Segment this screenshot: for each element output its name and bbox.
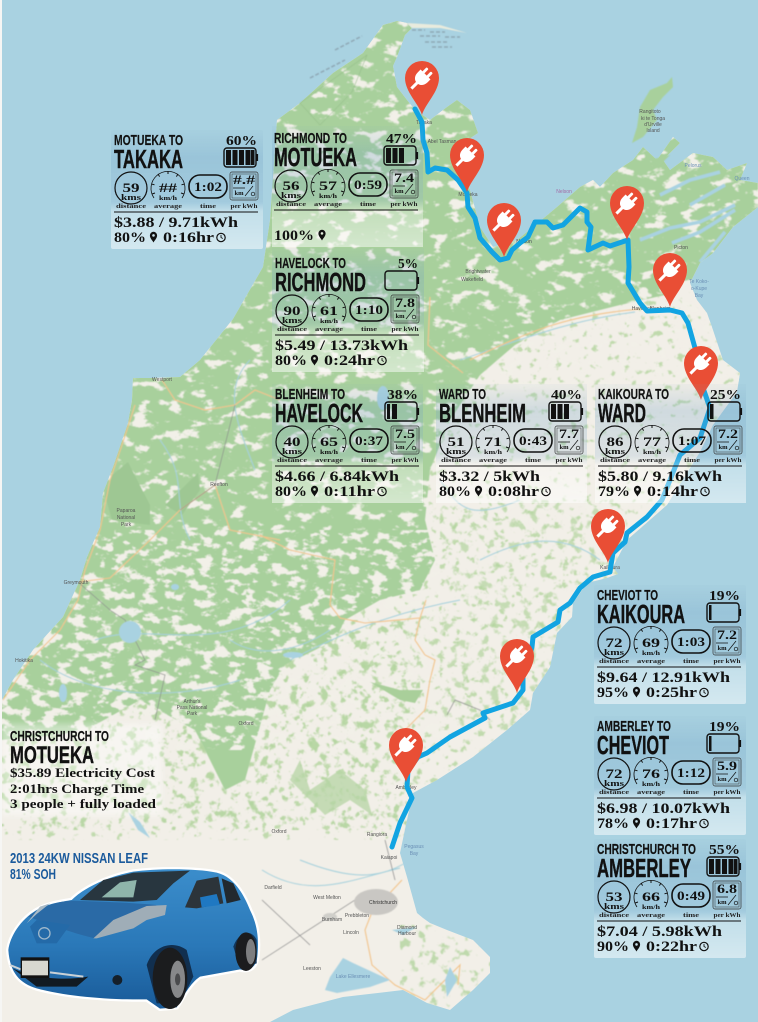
panel: Richmond to Motueka — [272, 126, 423, 247]
panel: Blenheim to Havelock: HAVELOCK — [275, 398, 363, 428]
map: place labels: Blenheim — [650, 306, 670, 312]
panel: Blenheim to Havelock: 40 — [284, 434, 300, 449]
map: place labels: Diamond — [397, 925, 417, 931]
panel: Motueka to Takaka: km/h — [159, 195, 177, 202]
panel: Kaikoura to Ward: 25% — [710, 388, 741, 403]
panel: Havelock to Richmond: km/h — [320, 318, 338, 325]
panel: Cheviot to Kaikoura: 69 — [642, 635, 661, 650]
summary: Christchurch to Motueka totals: CHRISTCHURCH TO — [10, 728, 109, 745]
map: place labels: West Melton — [313, 895, 341, 901]
summary: Christchurch to Motueka totals: 2:01hrs Charge Time — [10, 782, 145, 796]
map: place labels: Bay — [410, 851, 419, 857]
panel: Havelock to Richmond: 5% — [398, 257, 418, 272]
panel: Christchurch to Amberley: kms — [604, 901, 625, 911]
panel: Ward to Blenheim: km — [559, 444, 569, 451]
panel: Kaikoura to Ward: 77 — [643, 434, 662, 449]
panel: Kaikoura to Ward: average — [638, 457, 666, 464]
Marlborough Sounds channels — [640, 172, 735, 262]
panel: Havelock to Richmond: 80% — [275, 353, 307, 369]
panel: Amberley to Cheviot — [594, 716, 746, 835]
vehicle caption — [10, 850, 148, 883]
panel: Blenheim to Havelock: time — [361, 457, 377, 464]
map: place labels: Brightwater — [465, 269, 491, 275]
vehicle caption: 81% SOH — [10, 866, 56, 883]
Christchurch urban area — [354, 889, 398, 915]
panel: Motueka to Takaka: MOTUEKA TO — [114, 132, 183, 149]
panel: Cheviot to Kaikoura: distance — [599, 658, 629, 665]
panel: Richmond to Motueka: km/h — [319, 193, 337, 200]
map: place labels: National — [117, 515, 135, 521]
panel: Havelock to Richmond: $5.49 / 13.73kWh — [275, 338, 409, 354]
panel: Ward to Blenheim: 0:43 — [519, 433, 548, 448]
panel: Cheviot to Kaikoura: km/h — [642, 650, 660, 657]
panel: Ward to Blenheim: 0:08hr — [488, 484, 539, 500]
map: place labels: ki te Tonga — [641, 116, 665, 122]
panel: Ward to Blenheim: $3.32 / 5kWh — [439, 469, 541, 485]
map: place labels: Christchurch — [369, 900, 397, 906]
panel: Ward to Blenheim: per kWh — [556, 457, 583, 464]
roads — [3, 297, 640, 1000]
panel: Havelock to Richmond: 1:10 — [355, 302, 383, 317]
panel: Christchurch to Amberley: 0:49 — [677, 888, 706, 903]
panel: Kaikoura to Ward: WARD — [598, 398, 646, 428]
panel: Ward to Blenheim: 71 — [484, 434, 502, 449]
map: place labels: Abel Tasman — [428, 139, 457, 145]
panel: Christchurch to Amberley: CHRISTCHURCH TO — [597, 841, 696, 858]
panel: Blenheim to Havelock: 65 — [320, 434, 339, 449]
panel: Richmond to Motueka: 100% — [274, 228, 314, 244]
panel: Richmond to Motueka: time — [360, 201, 376, 208]
map: place labels: Havelock — [632, 306, 653, 312]
map: place labels: Lake Ellesmere — [336, 974, 370, 980]
panel: Havelock to Richmond: average — [315, 326, 343, 333]
panel: Motueka to Takaka: 0:16hr — [163, 230, 214, 246]
panel: Christchurch to Amberley: $7.04 / 5.98kWh — [597, 924, 723, 940]
panel: Kaikoura to Ward: kms — [605, 446, 626, 456]
panel: Motueka to Takaka: $3.88 / 9.71kWh — [114, 215, 239, 231]
panel: Richmond to Motueka: RICHMOND TO — [274, 130, 347, 147]
panel: Christchurch to Amberley: distance — [599, 912, 629, 919]
panel: Kaikoura to Ward: km/h — [643, 449, 661, 456]
panel: Cheviot to Kaikoura — [594, 585, 746, 704]
panel: Havelock to Richmond: 61 — [320, 303, 338, 318]
map: place labels: Prebbleton — [345, 913, 369, 919]
map: place labels: Kaikoura — [600, 565, 620, 571]
panel: Richmond to Motueka: 7.4 — [394, 170, 415, 185]
panel: Havelock to Richmond: 7.8 — [395, 295, 416, 310]
panel: Christchurch to Amberley: 53 — [606, 889, 623, 904]
map: place labels: Reefton — [210, 482, 228, 488]
panel: Amberley to Cheviot: 0:17hr — [646, 816, 697, 832]
panel: Ward to Blenheim: BLENHEIM — [439, 398, 526, 428]
rivers — [40, 312, 635, 886]
panel: Christchurch to Amberley: average — [637, 912, 665, 919]
panel: Richmond to Motueka: per kWh — [390, 201, 418, 208]
panel: Havelock to Richmond: 0:24hr — [324, 353, 375, 369]
panel: Motueka to Takaka: average — [154, 203, 182, 210]
panel: Amberley to Cheviot: average — [637, 789, 665, 796]
route line — [392, 109, 710, 847]
panel: Cheviot to Kaikoura: average — [637, 658, 665, 665]
panel: Motueka to Takaka: 59 — [122, 180, 140, 195]
panel: Blenheim to Havelock: kms — [282, 446, 303, 456]
map: place labels: Rangitoto — [639, 109, 661, 115]
panel: Amberley to Cheviot: per kWh — [714, 789, 741, 796]
panel: Cheviot to Kaikoura: 19% — [709, 589, 740, 604]
panel: Amberley to Cheviot: 78% — [597, 816, 629, 832]
panel: Blenheim to Havelock: 80% — [275, 484, 307, 500]
map: place labels: Leeston — [303, 966, 321, 972]
panel: Ward to Blenheim: WARD TO — [439, 386, 486, 403]
lakes — [119, 621, 141, 643]
panel: Motueka to Takaka: 80% — [114, 230, 146, 246]
panel: Richmond to Motueka: average — [314, 201, 342, 208]
panel: Amberley to Cheviot: distance — [599, 789, 629, 796]
map: place labels: Burnham — [322, 917, 342, 923]
panel: Richmond to Motueka: distance — [276, 201, 306, 208]
panel: Havelock to Richmond: 90 — [284, 303, 300, 318]
panel: Motueka to Takaka: 1:02 — [194, 179, 222, 194]
map: place labels: Westport — [152, 377, 173, 383]
panel: Havelock to Richmond: HAVELOCK TO — [275, 255, 346, 272]
panel: Christchurch to Amberley: 55% — [709, 843, 740, 858]
panel: Kaikoura to Ward: distance — [600, 457, 630, 464]
panel: Christchurch to Amberley: per kWh — [714, 912, 741, 919]
map: place labels: Park — [121, 522, 132, 528]
panel: Kaikoura to Ward: 86 — [606, 434, 624, 449]
map: place labels: Pelorus — [685, 163, 702, 169]
panel: Richmond to Motueka: 0:59 — [354, 177, 383, 192]
panel: Kaikoura to Ward: time — [684, 457, 700, 464]
panel: Motueka to Takaka: time — [200, 203, 216, 210]
panel: Richmond to Motueka: 47% — [386, 132, 417, 147]
panel: Blenheim to Havelock: distance — [277, 457, 307, 464]
panel: Motueka to Takaka: #.# — [233, 172, 256, 187]
map: place labels: Amberley — [395, 785, 417, 791]
map: place labels: Wakefield — [461, 277, 483, 283]
panel: Motueka to Takaka — [111, 130, 263, 249]
map: place labels: Kaiapoi — [381, 855, 397, 861]
panel: Amberley to Cheviot: AMBERLEY TO — [597, 718, 671, 735]
panel: Cheviot to Kaikoura: per kWh — [714, 658, 741, 665]
panel: Kaikoura to Ward — [595, 384, 746, 503]
panel: Motueka to Takaka: ## — [159, 180, 178, 195]
panel: Motueka to Takaka: TAKAKA — [114, 144, 183, 174]
panel: Ward to Blenheim: 40% — [551, 388, 582, 403]
panel: Ward to Blenheim: time — [525, 457, 541, 464]
map: D'Urville Island and spit — [300, 23, 673, 165]
map: place labels: Paparoa — [117, 508, 136, 514]
map: place labels: o-Kupe — [691, 286, 707, 292]
panel: Kaikoura to Ward: 1:07 — [678, 433, 707, 448]
map: place labels: Pegasus — [404, 844, 424, 850]
panel: Cheviot to Kaikoura: kms — [604, 647, 625, 657]
panel: Christchurch to Amberley: time — [683, 912, 699, 919]
panel: Motueka to Takaka: per kWh — [230, 203, 258, 210]
panel: Christchurch to Amberley: km — [717, 899, 727, 906]
map: place labels: Darfield — [264, 885, 282, 891]
panel: Amberley to Cheviot: km — [717, 776, 727, 783]
panel: Amberley to Cheviot: CHEVIOT — [597, 730, 669, 760]
panel: Kaikoura to Ward: 7.2 — [718, 426, 738, 441]
panel: Cheviot to Kaikoura: 7.2 — [717, 627, 737, 642]
panel: Cheviot to Kaikoura: 95% — [597, 685, 629, 701]
car: blue Nissan Leaf — [8, 869, 258, 1009]
panel: Cheviot to Kaikoura: 1:03 — [677, 634, 706, 649]
map: place labels: Park — [187, 711, 198, 717]
panel: Richmond to Motueka: 56 — [282, 178, 300, 193]
summary: Christchurch to Motueka totals — [2, 724, 162, 816]
map: place labels: Arthur's — [183, 699, 201, 705]
map: place labels: Oxford — [238, 721, 254, 727]
panel: Blenheim to Havelock: average — [315, 457, 343, 464]
panel: Ward to Blenheim: 51 — [448, 434, 464, 449]
panel: Christchurch to Amberley: 66 — [642, 889, 661, 904]
map: place labels: Rangiora — [367, 832, 387, 838]
panel: Havelock to Richmond: time — [361, 326, 377, 333]
left white margin — [0, 0, 2, 1022]
panel: Cheviot to Kaikoura: CHEVIOT TO — [597, 587, 658, 604]
summary: Christchurch to Motueka totals: $35.89 Electricity Cost — [10, 766, 156, 780]
panel: Amberley to Cheviot: 1:12 — [677, 765, 705, 780]
panel: Christchurch to Amberley: km/h — [642, 904, 660, 911]
panel: Blenheim to Havelock: km/h — [320, 449, 338, 456]
panel: Havelock to Richmond: kms — [282, 315, 303, 325]
panel: Christchurch to Amberley — [594, 839, 746, 958]
panel: Blenheim to Havelock: per kWh — [392, 457, 419, 464]
panel: Amberley to Cheviot: kms — [604, 778, 625, 788]
map: place labels: Te Koko- — [689, 279, 709, 285]
panel: Cheviot to Kaikoura: $9.64 / 12.91kWh — [597, 670, 731, 686]
panel: Kaikoura to Ward: KAIKOURA TO — [598, 386, 669, 403]
summary: Christchurch to Motueka totals: 3 people + fully loaded — [10, 797, 156, 811]
panel: Amberley to Cheviot: km/h — [642, 781, 660, 788]
panel: Havelock to Richmond — [272, 248, 424, 372]
panel: Motueka to Takaka: km — [234, 190, 244, 197]
map: place labels: Oxford — [271, 829, 287, 835]
panel: Amberley to Cheviot: $6.98 / 10.07kWh — [597, 801, 731, 817]
panel: Motueka to Takaka: kms — [121, 192, 142, 202]
map: place labels: Picton — [674, 245, 688, 251]
panel: Blenheim to Havelock: $4.66 / 6.84kWh — [275, 469, 400, 485]
panel: Amberley to Cheviot: time — [683, 789, 699, 796]
panel: Ward to Blenheim — [436, 384, 587, 503]
panel: Cheviot to Kaikoura: km — [717, 645, 727, 652]
panel: Cheviot to Kaikoura: time — [683, 658, 699, 665]
map: place labels: Hokitika — [15, 658, 33, 664]
panel: Blenheim to Havelock: 38% — [387, 388, 418, 403]
panel: Blenheim to Havelock: 0:11hr — [324, 484, 375, 500]
panel: Richmond to Motueka: 57 — [319, 178, 338, 193]
panel: Richmond to Motueka: MOTUEKA — [274, 142, 357, 172]
panel: Christchurch to Amberley: 90% — [597, 939, 629, 955]
panel: Ward to Blenheim: kms — [446, 446, 467, 456]
panel: Amberley to Cheviot: 19% — [709, 720, 740, 735]
map: place labels: Nelson — [516, 239, 532, 245]
panel: Blenheim to Havelock: 0:37 — [355, 433, 384, 448]
panel: Kaikoura to Ward: 79% — [598, 484, 630, 500]
panel: Christchurch to Amberley: AMBERLEY — [597, 853, 691, 883]
panel: Blenheim to Havelock — [272, 384, 423, 503]
charge stop pins — [389, 61, 718, 782]
panel: Ward to Blenheim: km/h — [484, 449, 502, 456]
map: place labels: Lincoln — [343, 930, 359, 936]
panel: Ward to Blenheim: average — [479, 457, 507, 464]
panel: Blenheim to Havelock: km — [395, 444, 405, 451]
map: place labels: Motueka — [458, 192, 478, 198]
panel: Ward to Blenheim: 80% — [439, 484, 471, 500]
map: place labels: Takaka — [416, 120, 432, 126]
panel: Christchurch to Amberley: 0:22hr — [646, 939, 697, 955]
map: place labels: Island — [646, 128, 660, 134]
panel: Motueka to Takaka: 60% — [226, 134, 257, 149]
panel: Havelock to Richmond: distance — [277, 326, 307, 333]
panel: Motueka to Takaka: distance — [116, 203, 146, 210]
map: place labels: Harbour — [398, 931, 416, 937]
panel: Havelock to Richmond: km — [395, 313, 405, 320]
panel: Kaikoura to Ward: km — [718, 444, 728, 451]
vehicle caption: 2013 24KW NISSAN LEAF — [10, 850, 148, 867]
panel: Amberley to Cheviot: 5.9 — [717, 758, 738, 773]
panel: Blenheim to Havelock: 7.5 — [395, 426, 416, 441]
panel: Amberley to Cheviot: 72 — [606, 766, 622, 781]
panel: Richmond to Motueka: km — [394, 188, 404, 195]
map: place labels: Nelson — [556, 189, 572, 195]
panel: Ward to Blenheim: distance — [441, 457, 471, 464]
panel: Kaikoura to Ward: per kWh — [714, 457, 742, 464]
map: place labels: Greymouth — [64, 580, 89, 586]
panel: Havelock to Richmond: per kWh — [392, 326, 419, 333]
panel: Amberley to Cheviot: 76 — [642, 766, 661, 781]
panel: Ward to Blenheim: 7.7 — [559, 426, 580, 441]
panel: Kaikoura to Ward: 0:14hr — [647, 484, 698, 500]
panel: Cheviot to Kaikoura: 0:25hr — [646, 685, 697, 701]
panel: Havelock to Richmond: RICHMOND — [275, 267, 366, 297]
map: place labels: Bay — [695, 293, 704, 299]
panel: Cheviot to Kaikoura: KAIKOURA — [597, 599, 685, 629]
panel: Richmond to Motueka: kms — [281, 190, 302, 200]
summary: Christchurch to Motueka totals: MOTUEKA — [10, 742, 94, 769]
panel: Cheviot to Kaikoura: 72 — [606, 635, 622, 650]
panel: Kaikoura to Ward: $5.80 / 9.16kWh — [598, 469, 723, 485]
panel: Christchurch to Amberley: 6.8 — [717, 881, 738, 896]
map: place labels: d'Urville — [644, 122, 662, 128]
map: place labels: Queen — [734, 176, 750, 182]
map: place labels: Pass National — [177, 705, 207, 711]
panel: Blenheim to Havelock: BLENHEIM TO — [275, 386, 345, 403]
